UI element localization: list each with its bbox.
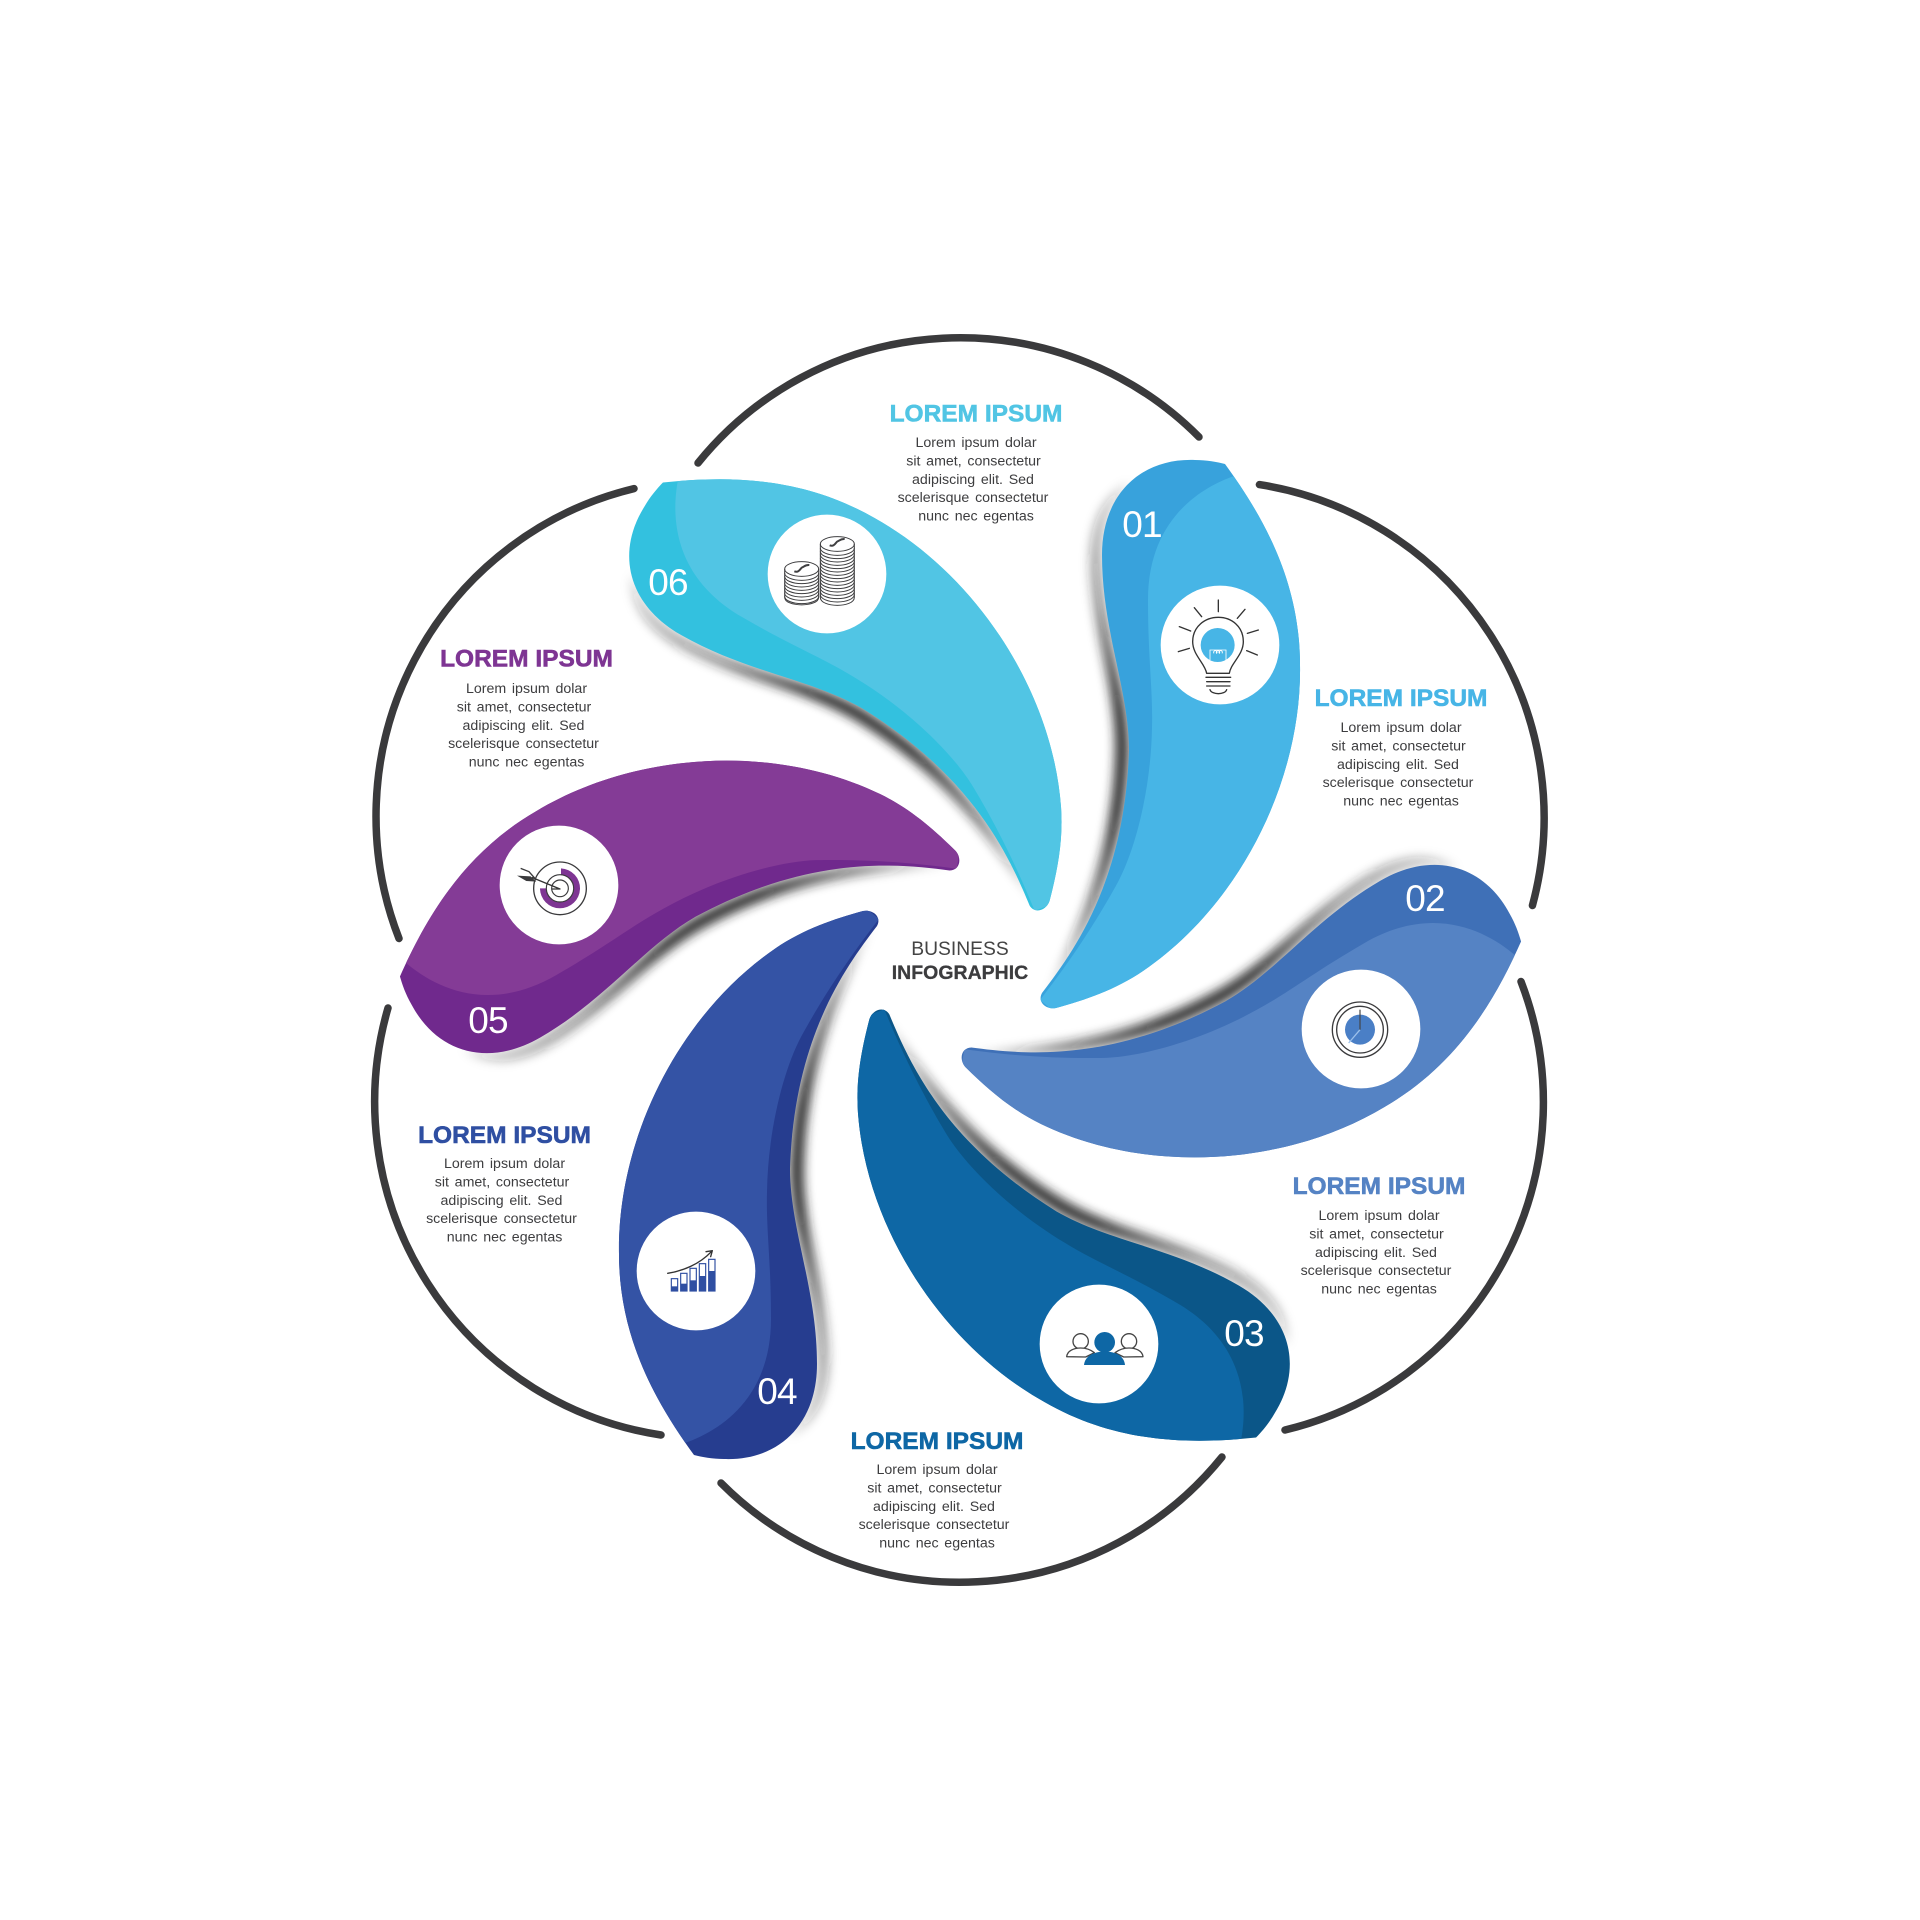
text block 02: LOREM IPSUM [1293, 1173, 1465, 1200]
text block 06: adipiscing elit. Sed [912, 472, 1034, 488]
text block 01: LOREM IPSUM [1315, 685, 1487, 712]
number 03: 03 [1224, 1313, 1264, 1354]
petal 03 shape [857, 1010, 1292, 1441]
center title [892, 939, 1028, 984]
center title: BUSINESS [911, 939, 1009, 960]
panel: petal 04 [618, 910, 878, 1460]
text block 02: Lorem ipsum dolar [1318, 1208, 1440, 1224]
number 06: 06 [648, 562, 688, 603]
text block 05: LOREM IPSUM [440, 646, 613, 672]
text block 04: adipiscing elit. Sed [441, 1193, 562, 1209]
text block 05: Lorem ipsum dolar [466, 681, 587, 697]
panel: petal 02 [962, 851, 1521, 1158]
text block 05: nunc nec egentas [469, 755, 584, 771]
text block 02 [1293, 1173, 1465, 1298]
petal 02 shape [962, 851, 1521, 1158]
icon: target with arrow [500, 826, 618, 944]
panel: petal 01 [1040, 460, 1300, 1008]
text block 06: sit amet, consectetur [906, 453, 1041, 469]
text block 04: Lorem ipsum dolar [444, 1156, 565, 1172]
petal 05 shape [400, 760, 960, 1067]
petal 01 shape [1040, 460, 1300, 1008]
text block 03: scelerisque consectetur [859, 1517, 1010, 1533]
text block 02: adipiscing elit. Sed [1315, 1245, 1437, 1261]
text block 03 [851, 1428, 1023, 1552]
number 02: 02 [1405, 878, 1445, 919]
text block 03: Lorem ipsum dolar [876, 1462, 998, 1478]
text block 04: nunc nec egentas [447, 1230, 562, 1246]
number 01: 01 [1122, 504, 1162, 545]
text block 02: scelerisque consectetur [1301, 1263, 1452, 1279]
text block 06: nunc nec egentas [918, 509, 1034, 525]
petal 04 shape [618, 910, 878, 1460]
text block 01: nunc nec egentas [1343, 794, 1459, 810]
text block 04 [418, 1122, 591, 1246]
text block 03: sit amet, consectetur [867, 1480, 1002, 1496]
icon: light bulb [1161, 586, 1279, 704]
text block 05: sit amet, consectetur [457, 699, 592, 715]
text block 02: sit amet, consectetur [1309, 1226, 1444, 1242]
number 04: 04 [757, 1371, 797, 1412]
text block 01: Lorem ipsum dolar [1340, 720, 1462, 736]
text block 01 [1315, 685, 1487, 810]
text block 01: adipiscing elit. Sed [1337, 757, 1459, 773]
text block 03: adipiscing elit. Sed [873, 1499, 995, 1515]
text block 05: scelerisque consectetur [448, 736, 599, 752]
icon: rising bar chart [637, 1212, 755, 1330]
text block 06 [890, 401, 1062, 525]
text block 05 [440, 646, 613, 771]
panel: petal 03 [857, 1010, 1292, 1441]
text block 06: scelerisque consectetur [898, 490, 1049, 506]
text block 01: sit amet, consectetur [1331, 738, 1466, 754]
text block 04: sit amet, consectetur [435, 1174, 570, 1190]
text block 03: LOREM IPSUM [851, 1428, 1023, 1455]
text block 02: nunc nec egentas [1321, 1282, 1437, 1298]
text block 05: adipiscing elit. Sed [463, 718, 584, 734]
panel: petal 05 [400, 760, 960, 1067]
text block 06: LOREM IPSUM [890, 401, 1062, 428]
petal 06 shape [627, 479, 1062, 910]
icon: people [1040, 1285, 1158, 1403]
text block 06: Lorem ipsum dolar [915, 435, 1037, 451]
number 05: 05 [468, 1000, 508, 1041]
icon: coin stacks [768, 515, 886, 633]
center title: INFOGRAPHIC [892, 962, 1028, 984]
panel: petal 06 [627, 479, 1062, 910]
text block 04: scelerisque consectetur [426, 1211, 577, 1227]
text block 01: scelerisque consectetur [1323, 775, 1474, 791]
icon: clock [1302, 970, 1420, 1088]
text block 03: nunc nec egentas [879, 1536, 995, 1552]
text block 04: LOREM IPSUM [418, 1122, 591, 1149]
outer ring arcs [375, 338, 1618, 1582]
